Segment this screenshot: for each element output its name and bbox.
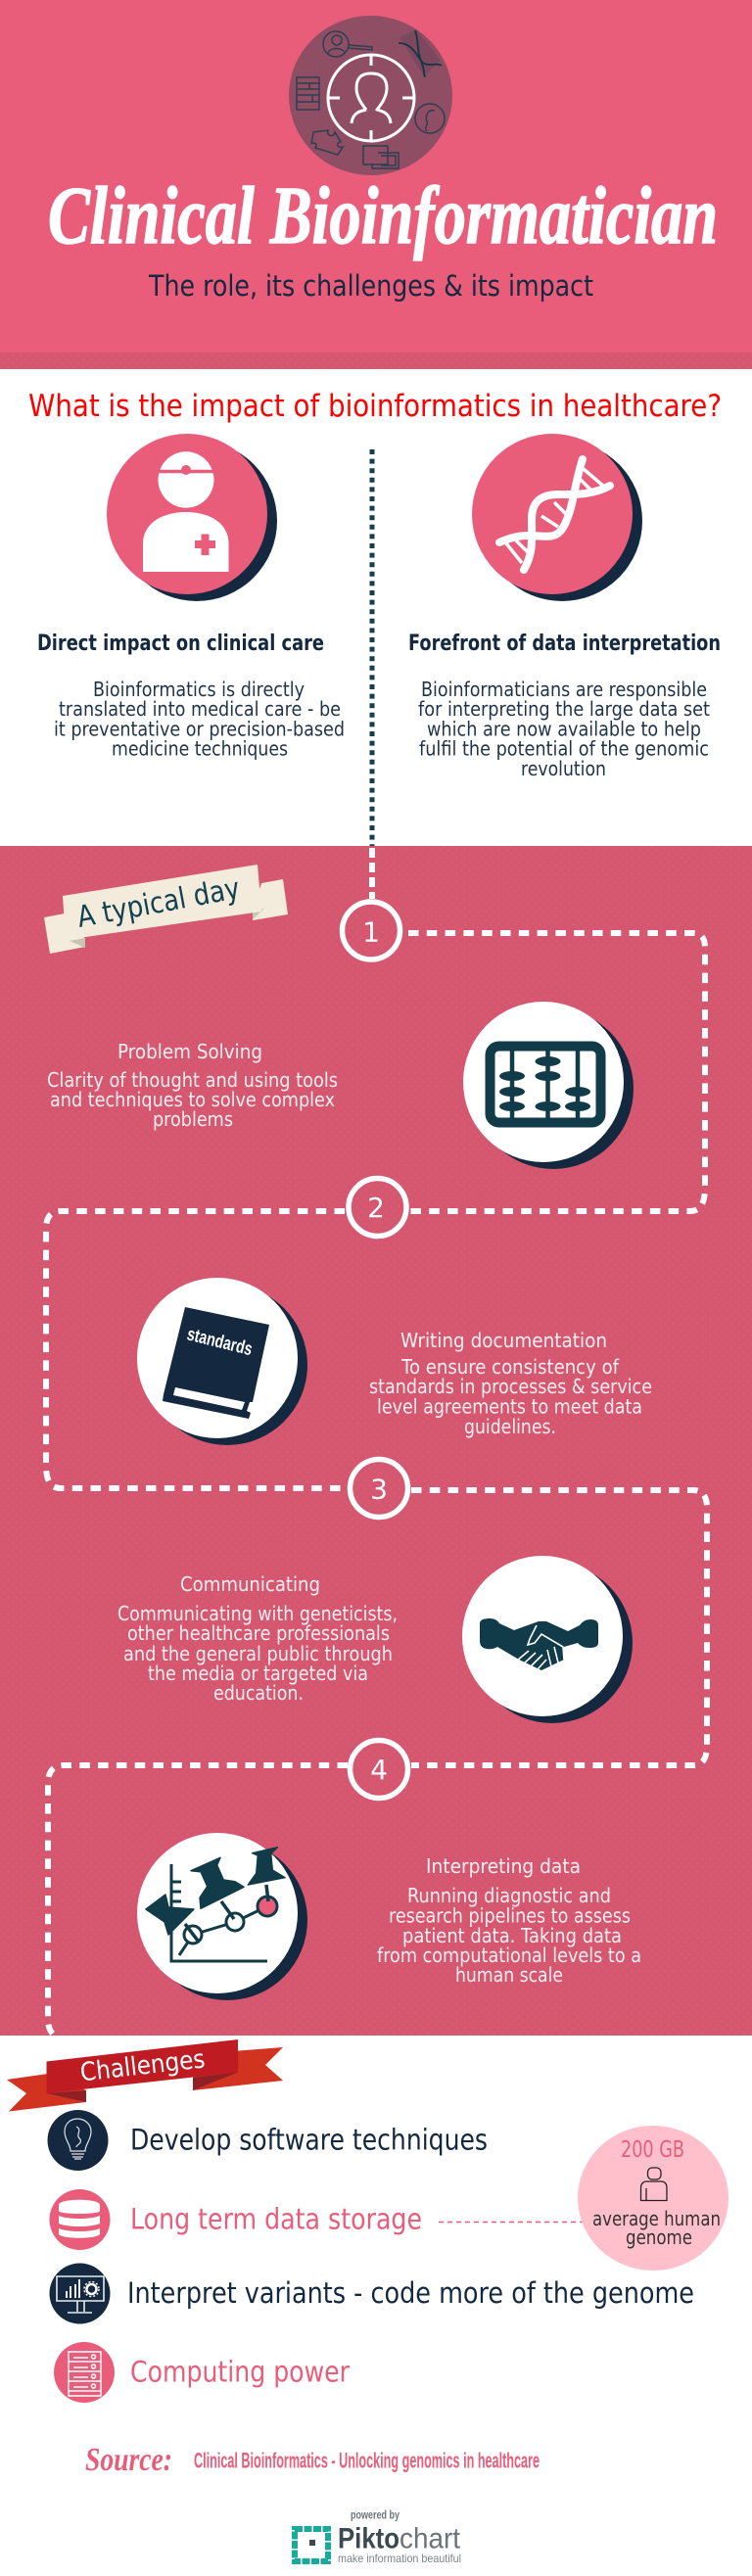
step: communicating: other healthcare professionals [127,1621,390,1645]
callout: 200 GB genome: average human [592,2207,721,2230]
step: problem solving: Clarity of thought and using tools [47,1068,338,1092]
icon: light bulb [47,2110,108,2171]
icon: server rack [54,2342,115,2403]
logo: piktochart: powered by [351,2508,400,2522]
text block [54,678,345,761]
step: problem solving: and techniques to solve complex [50,1088,335,1111]
step: writing documentation [369,1329,652,1438]
source line [85,2442,540,2478]
panel: direct impact on clinical care [37,434,345,761]
banner: a typical day [44,865,288,954]
step: interpreting data: patient data. Taking data [402,1924,622,1947]
step: problem solving: Problem Solving [118,1040,262,1063]
step: communicating: and the general public through [123,1642,393,1665]
icon: bioinformatician emblem [289,16,452,175]
divider: dotted line [370,449,374,846]
step marker 3: 3 [370,1474,388,1506]
challenge: data storage: Long term data storage [130,2203,422,2236]
text block [418,678,710,780]
callout: 200 GB genome [578,2126,728,2271]
step: problem solving: problems [153,1107,233,1131]
text block: which are now available to help [427,717,701,740]
step: interpreting data: research pipelines to assess [389,1903,631,1927]
step: communicating: Communicating [180,1572,320,1596]
step: interpreting data: Running diagnostic and [407,1884,611,1907]
step: problem solving [47,1040,338,1131]
source line: Source: [85,2442,172,2478]
panel: challenges [7,2039,728,2403]
text block: translated into medical care - be [59,697,341,721]
banner: a typical day: A typical day [74,871,243,935]
challenge: develop software: Develop software techniques [130,2123,488,2156]
arrow: dashed timeline path [46,848,707,2036]
text block: it preventative or precision-based [54,717,345,740]
step: communicating: the media or targeted via [148,1662,368,1685]
panel: forefront of data interpretation [408,434,721,780]
text block: revolution [521,757,606,780]
icon: standards book [137,1278,307,1445]
logo: piktochart: Pikto [338,2523,400,2555]
icon: abacus [463,1002,634,1169]
step: writing documentation: Writing documentation [400,1329,607,1352]
callout: 200 GB genome: genome [626,2225,692,2249]
icon: doctor [107,434,277,601]
panel: a typical day [0,846,752,2036]
icon: dna [472,434,642,601]
callout: 200 GB genome: 200 GB [621,2137,684,2163]
step: writing documentation: To ensure consistency of [400,1355,620,1379]
step marker 2: 2 [367,1192,385,1224]
heading: Direct impact on clinical care [37,632,324,656]
banner: challenges [7,2039,283,2111]
step marker 1 [343,902,400,960]
step marker 2 [349,1179,406,1236]
step marker 4 [351,1741,407,1798]
step marker 3 [351,1459,407,1518]
icon: pinned data chart [137,1833,307,2000]
text block: for interpreting the large data set [418,697,710,721]
banner: challenges: Challenges [78,2044,207,2087]
logo: piktochart [295,2508,461,2565]
step: communicating: Communicating with geneticists, [118,1602,398,1625]
step: writing documentation: standards in processes & service [369,1375,652,1398]
step: communicating [118,1572,398,1705]
icon: database [49,2189,110,2250]
subtitle: The role, its challenges & its impact [148,269,593,303]
step: interpreting data: human scale [455,1963,563,1987]
icon: monitor analytics [49,2264,110,2324]
logo: piktochart: chart [400,2523,461,2555]
text block: Bioinformatics is directly [93,678,305,701]
step: writing documentation: level agreements to meet data [377,1394,642,1418]
icon: handshake [462,1556,633,1723]
step marker 1: 1 [362,916,380,949]
panel: header [0,0,752,369]
step: interpreting data: Interpreting data [426,1854,581,1878]
text block: medicine techniques [112,737,288,761]
text block: fulfil the potential of the genomic [419,737,709,761]
icon: standards book: standards [185,1324,255,1360]
connector: dashed line [439,2221,584,2223]
step: interpreting data [377,1854,641,1987]
step: interpreting data: from computational levels to a [377,1944,641,1967]
text block: Bioinformaticians are responsible [421,678,707,701]
logo: piktochart: make information beautiful [338,2552,461,2565]
challenge: computing power: Computing power [130,2356,350,2389]
step: communicating: education. [213,1681,304,1705]
step: writing documentation: guidelines. [464,1415,556,1438]
step marker 4: 4 [370,1754,388,1786]
